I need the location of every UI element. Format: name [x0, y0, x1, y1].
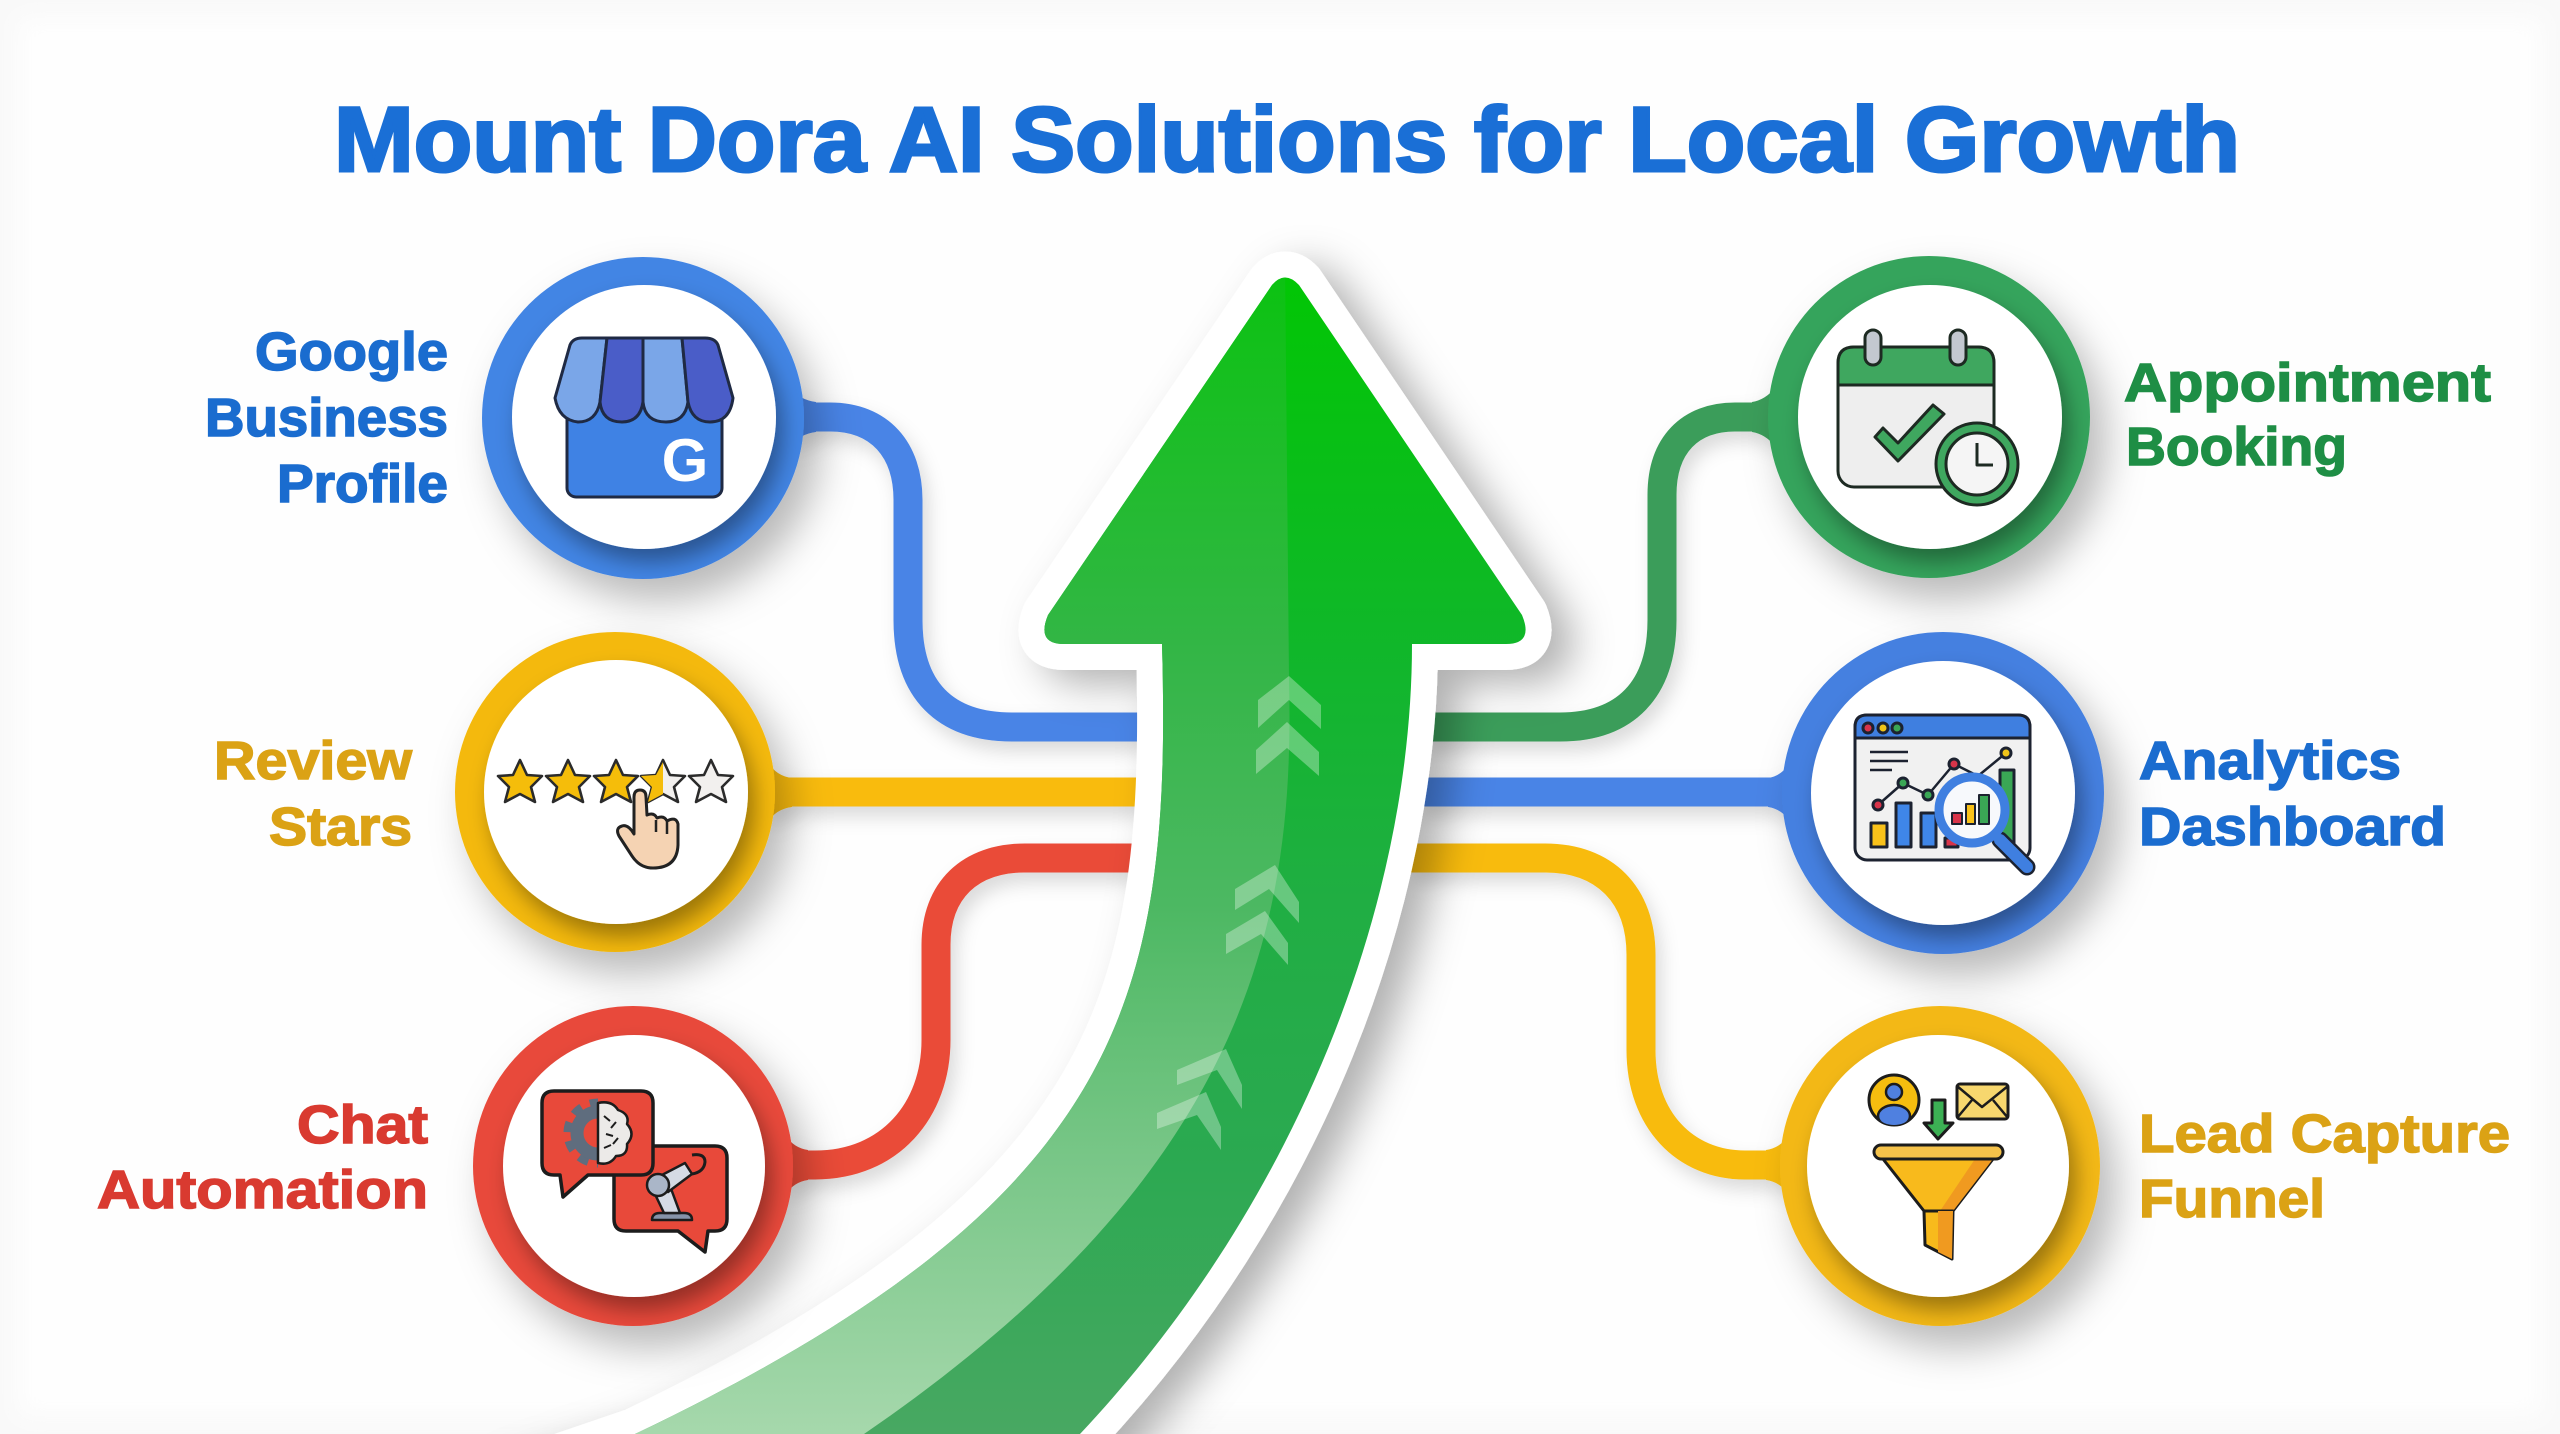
- label: Business: [205, 388, 448, 448]
- arrow chevrons: [1157, 676, 1321, 1150]
- label: Stars: [269, 797, 412, 857]
- label: Funnel: [2139, 1169, 2325, 1229]
- icon: storefront: G: [662, 427, 708, 494]
- ring: green: [1768, 256, 2090, 578]
- panel: Analytics Dashboard: [1782, 632, 2446, 954]
- ring: yellow: [455, 632, 775, 952]
- label: Lead Capture: [2139, 1104, 2510, 1164]
- label: [2139, 1104, 2510, 1229]
- connector: Review Stars to arrow: [765, 762, 1150, 822]
- icon: dashboard with magnifier: [1855, 715, 2030, 867]
- label: Profile: [277, 454, 448, 514]
- label: Review: [214, 731, 413, 791]
- label: [214, 731, 413, 857]
- ring: blue: [482, 257, 804, 579]
- title: Mount Dora AI Solutions for Local Growth: [334, 89, 2240, 191]
- panel: Lead Capture Funnel: [1780, 1006, 2510, 1326]
- growth arrow: [400, 260, 1526, 1434]
- ring: red: [473, 1006, 793, 1326]
- panel: Google Business Profile: [205, 257, 804, 579]
- label: Dashboard: [2139, 797, 2446, 857]
- label: [2139, 731, 2446, 857]
- icon: lead funnel: [1869, 1075, 2008, 1259]
- label: Appointment: [2124, 353, 2491, 413]
- panel: Chat Automation: [97, 1006, 793, 1326]
- ring: blue: [1782, 632, 2104, 954]
- label: Google: [255, 322, 448, 382]
- label: Analytics: [2139, 731, 2401, 791]
- connector: Chat Automation to arrow: [786, 858, 1150, 1194]
- label: Chat: [297, 1095, 428, 1155]
- panel: Appointment Booking: [1768, 256, 2491, 578]
- connector: Google Business Profile to arrow: [790, 388, 1150, 727]
- label: [205, 322, 448, 514]
- connector: Analytics Dashboard to arrow: [1420, 762, 1795, 822]
- label: [97, 1095, 428, 1220]
- label: Booking: [2126, 417, 2347, 477]
- label: [2124, 353, 2491, 477]
- ring: yellow: [1780, 1006, 2100, 1326]
- connector: Lead Capture Funnel to arrow: [1410, 858, 1795, 1194]
- icon: storefront: [555, 338, 733, 497]
- connector: Appointment Booking to arrow: [1425, 388, 1775, 727]
- icon: chat bubbles with AI and robot arm: [542, 1091, 727, 1252]
- icon: calendar with clock: [1838, 330, 2018, 505]
- label: Automation: [97, 1160, 428, 1220]
- panel: Review Stars: [214, 632, 775, 952]
- icon: rating stars with hand: [498, 760, 733, 868]
